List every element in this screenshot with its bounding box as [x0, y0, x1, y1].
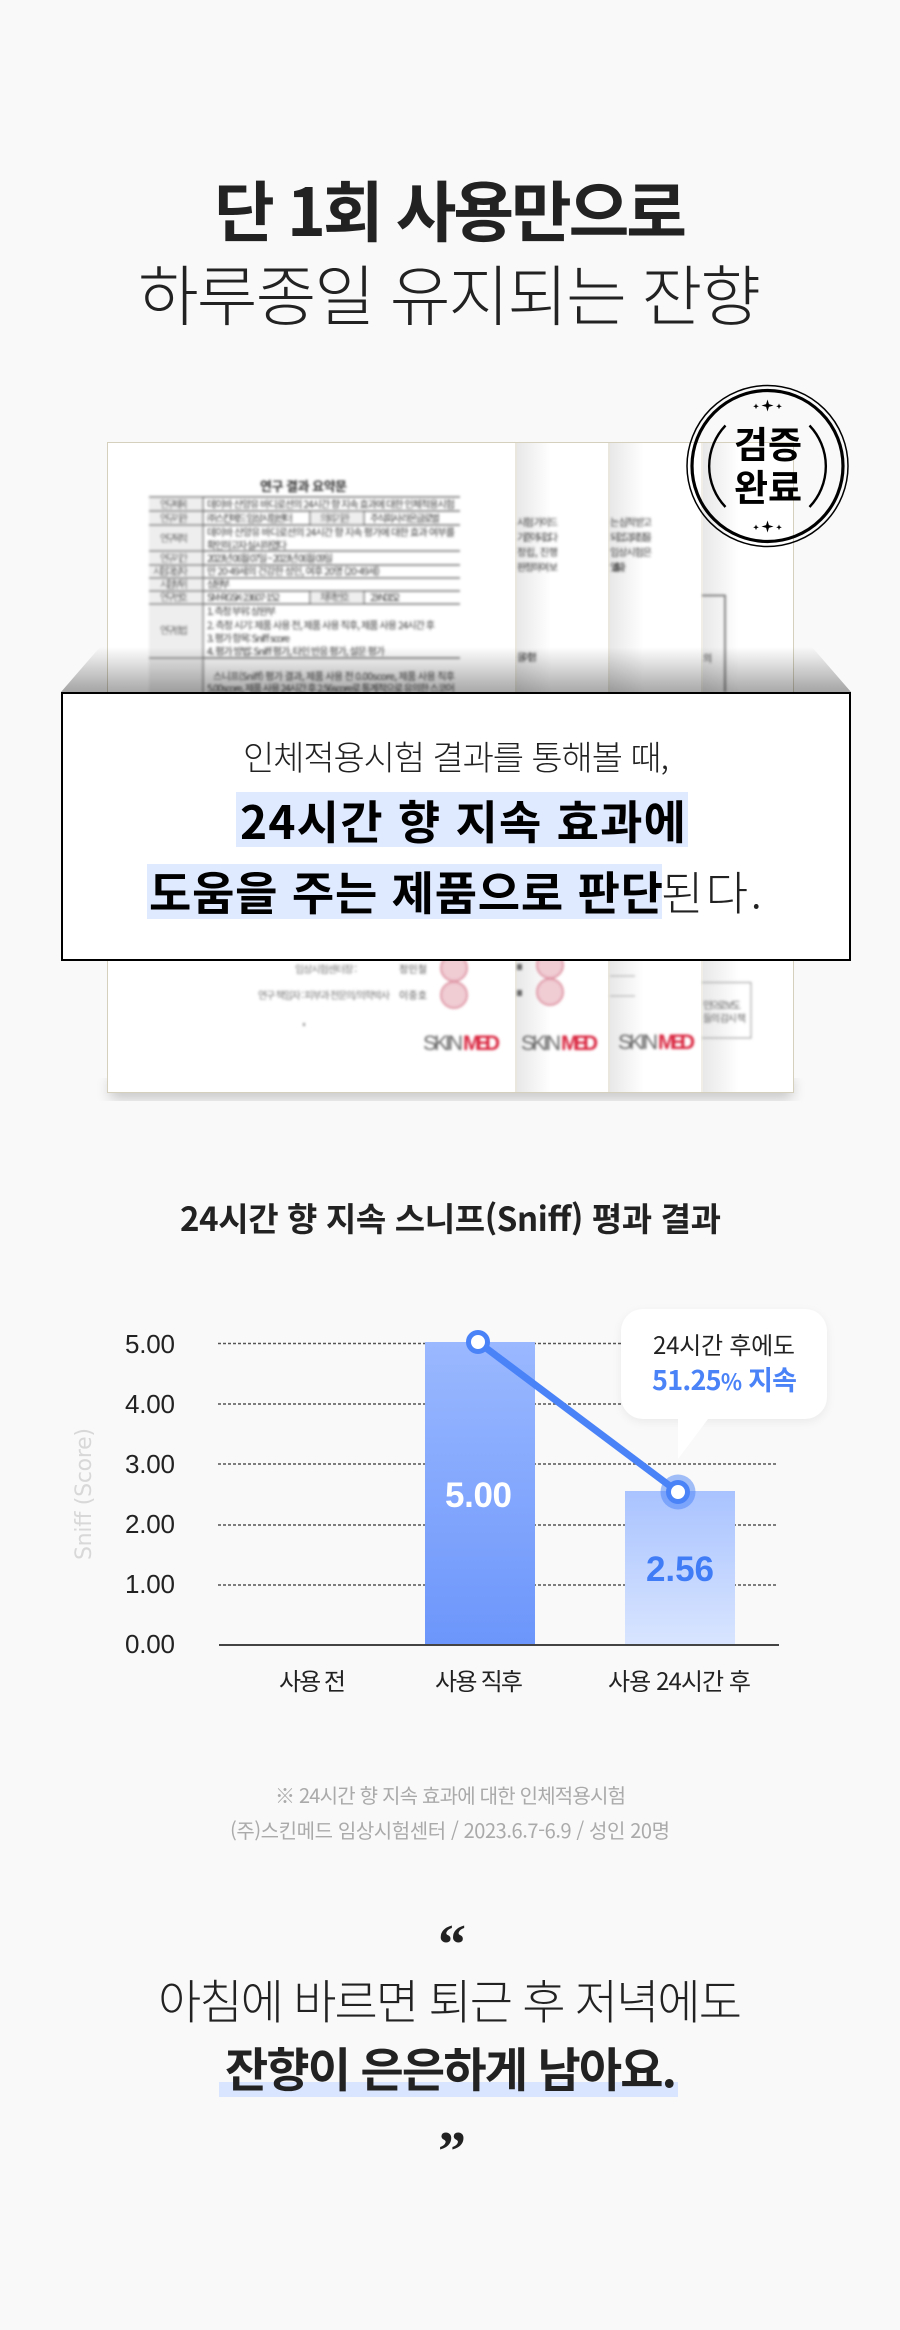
- x axis labels: 사용 직후: [435, 1662, 523, 1697]
- logo page 2: SKIN: [521, 1032, 561, 1055]
- blurred report summary page: 1. 측정 부위: 상완부: [207, 603, 276, 618]
- title line light: 하루종일 유지되는 잔향: [138, 244, 761, 340]
- quote line 1: 아침에 바르면 퇴근 후 저녁에도: [158, 1964, 742, 2033]
- marker bottom: [668, 1482, 688, 1502]
- blurred report summary page: 데이바 산양유 바디로션의 24시간 향 지속 효과에 대한 인체적용시험: [207, 496, 455, 511]
- blurred second and third page text: 되었고, 회장을: [610, 529, 652, 544]
- callout bold line 2: 도움을 주는 제품으로 판단: [149, 858, 663, 924]
- x axis labels: [279, 1662, 751, 1697]
- blurred report summary page: 연구 기간: [160, 550, 188, 565]
- footnote: (주)스킨메드 임상시험센터 / 2023.6.7-6.9 / 성인 20명: [230, 1815, 670, 1844]
- logo page 2: [521, 1032, 598, 1055]
- x axis labels: 사용 24시간 후: [608, 1662, 751, 1697]
- blurred second and third page text: 시험 가이드: [517, 514, 558, 529]
- callout bubble shadow: [621, 1312, 827, 1422]
- bar chart: sniff score: [72, 1309, 827, 1697]
- y axis labels: 3.00: [125, 1449, 175, 1479]
- title line bold: 단 1회 사용만으로: [214, 160, 687, 256]
- logo page 1: MED: [463, 1032, 500, 1055]
- blurred second and third page text: 정립, 진행: [517, 544, 558, 559]
- blurred report summary page: 4. 평가 방법: Sniff 평가, 타인 반응 평가, 설문 평가: [207, 643, 385, 658]
- bar: immediately after use: [425, 1342, 535, 1645]
- logo page 2: MED: [561, 1032, 598, 1055]
- blurred report summary page: ㈜스킨메드 임상시험센터: [207, 510, 293, 525]
- blurred report summary page: 연구 방법: [160, 622, 188, 637]
- logo page 1: SKIN: [423, 1032, 463, 1055]
- blurred signature lines and seals: 임상시험센터장 :: [295, 961, 357, 976]
- blurred signature lines and seals: 정 민 철: [399, 961, 427, 976]
- trend line: [478, 1342, 678, 1492]
- blurred signature lines and seals: 들의 감시 책: [703, 1010, 746, 1025]
- icon: verified stamp: 완료: [734, 458, 802, 512]
- blurred report summary page: 연구 목적: [160, 530, 188, 545]
- callout bold line 1: 24시간 향 지속 효과에: [240, 787, 686, 853]
- y axis labels: 4.00: [125, 1389, 175, 1419]
- blurred report summary page: 23-N0152: [370, 589, 400, 604]
- blurred report summary page: 연구 결과 요약문: [260, 476, 347, 495]
- icon: verified stamp: 검증: [734, 415, 802, 469]
- blurred report summary page: 2. 측정 시기: 제품 사용 전, 제품 사용 직후, 제품 사용 24시간 후: [207, 617, 435, 632]
- bubble text line 2: 51.25% 지속: [652, 1359, 797, 1398]
- callout light ending: 된다.: [661, 858, 762, 924]
- blurred signature lines and seals: 민으로 보도: [703, 997, 741, 1012]
- blurred report summary page: 스니프(Sniff) 평가 결과, 제품 사용 전 0.00score, 제품 사용 직후: [213, 668, 455, 683]
- y axis labels: 1.00: [125, 1569, 175, 1599]
- blurred second and third page text: 있습니다: [610, 559, 626, 574]
- blurred second and third page text: [517, 514, 725, 692]
- blurred second and third page text: 을 이행: [517, 649, 537, 664]
- blurred second and third page text: 는 심적 받고: [610, 514, 652, 529]
- SKINMED logo marks: [423, 1031, 695, 1055]
- icon: verified stamp: [687, 386, 848, 546]
- blurred signature lines and seals: [258, 952, 751, 1038]
- page seam shading: [516, 443, 739, 1092]
- blurred second and third page text: 기준이 되었다: [517, 529, 558, 544]
- chart heading: 24시간 향 지속 스니프(Sniff) 평과 결과: [180, 1193, 721, 1241]
- quote line 2: 잔향이 은은하게 남아요.: [225, 2032, 677, 2101]
- bar value 2.56: 2.56: [646, 1550, 714, 1589]
- blurred report summary page: 데이바 산양유 바디로션의 24시간 향 지속 평가에 대한 효과 여부를: [207, 524, 455, 539]
- logo page 1: [423, 1032, 500, 1055]
- blurred report summary page: 상완부: [207, 576, 230, 591]
- shelf shadow: [61, 647, 851, 692]
- x axis labels: 사용 전: [279, 1662, 346, 1697]
- blurred report summary page: 확인하고자 실시하였다: [207, 537, 287, 552]
- footnote: ※ 24시간 향 지속 효과에 대한 인체적용시험: [275, 1780, 626, 1809]
- blurred report summary page: SM-RGSK-23607-152: [207, 589, 280, 604]
- highlight line 1: [236, 792, 688, 847]
- blurred report summary page: 시험 대상자: [153, 563, 188, 578]
- quote highlight: [219, 2082, 678, 2097]
- blurred report summary page: 5.00score, 제품 사용 24시간 후 2.56score로 통계적으로 유의한 스코어: [207, 680, 455, 695]
- blurred report summary page: 만 20-49세의 건강한 성인, 여후 20명 (20-49세): [207, 563, 380, 578]
- blurred report summary page: 연구 기관: [160, 510, 188, 525]
- title: [138, 160, 761, 340]
- blurred report summary page: 주식회사 라온글로벌: [370, 510, 440, 525]
- callout box: clinical test conclusion: [62, 693, 850, 960]
- blurred report summary page: 3. 평가 항목: Sniff score: [207, 630, 290, 645]
- panel: clinical test documents: [61, 442, 851, 1098]
- bar: 24 hours after use: [625, 1491, 735, 1645]
- y axis labels: 0.00: [125, 1629, 175, 1659]
- blurred report summary page: 채택 번호: [320, 589, 350, 604]
- y axis labels: 5.00: [125, 1329, 175, 1359]
- marker top: [468, 1332, 488, 1352]
- bar value 5.00: 5.00: [445, 1476, 512, 1515]
- blurred second and third page text: 의: [703, 650, 712, 665]
- blurred report summary page: 2023년 06월 07일 ~ 2023년 06월 09일: [207, 550, 333, 565]
- blurred signature lines and seals: 연구 책임자 : 피부과 전문의/의학박사: [258, 987, 390, 1002]
- y axis labels: 2.00: [125, 1509, 175, 1539]
- blurred second and third page text: 판정하여 보: [517, 559, 558, 574]
- document drop shadow: [110, 1080, 792, 1098]
- footnote: [230, 1780, 670, 1844]
- blurred signature lines and seals: 이 중 호: [399, 987, 427, 1002]
- testimonial quote: [158, 1914, 742, 2183]
- blurred report summary page: 연구 제목: [160, 496, 188, 511]
- closing quote mark: ”: [438, 2121, 466, 2183]
- blurred report summary page: [149, 476, 460, 697]
- opening quote mark: “: [438, 1914, 466, 1976]
- blurred report summary page: 연구 번호: [160, 589, 188, 604]
- logo page 3: [618, 1031, 695, 1054]
- logo page 3: MED: [658, 1031, 695, 1054]
- marker halo: [660, 1474, 696, 1510]
- document sheet: [108, 442, 794, 1092]
- blurred report summary page: 시험 부위: [160, 576, 188, 591]
- y axis title: Sniff (Score): [72, 1428, 97, 1560]
- blurred second and third page text: 임상시험은: [610, 544, 652, 559]
- bubble text line 1: 24시간 후에도: [653, 1326, 795, 1361]
- y axis labels: [125, 1329, 175, 1659]
- highlight line 2: [147, 864, 662, 919]
- callout bubble: [621, 1309, 827, 1459]
- callout intro text: 인체적용시험 결과를 통해볼 때,: [243, 731, 669, 780]
- logo page 3: SKIN: [618, 1031, 658, 1054]
- blurred report summary page: 의뢰 기관: [320, 510, 350, 525]
